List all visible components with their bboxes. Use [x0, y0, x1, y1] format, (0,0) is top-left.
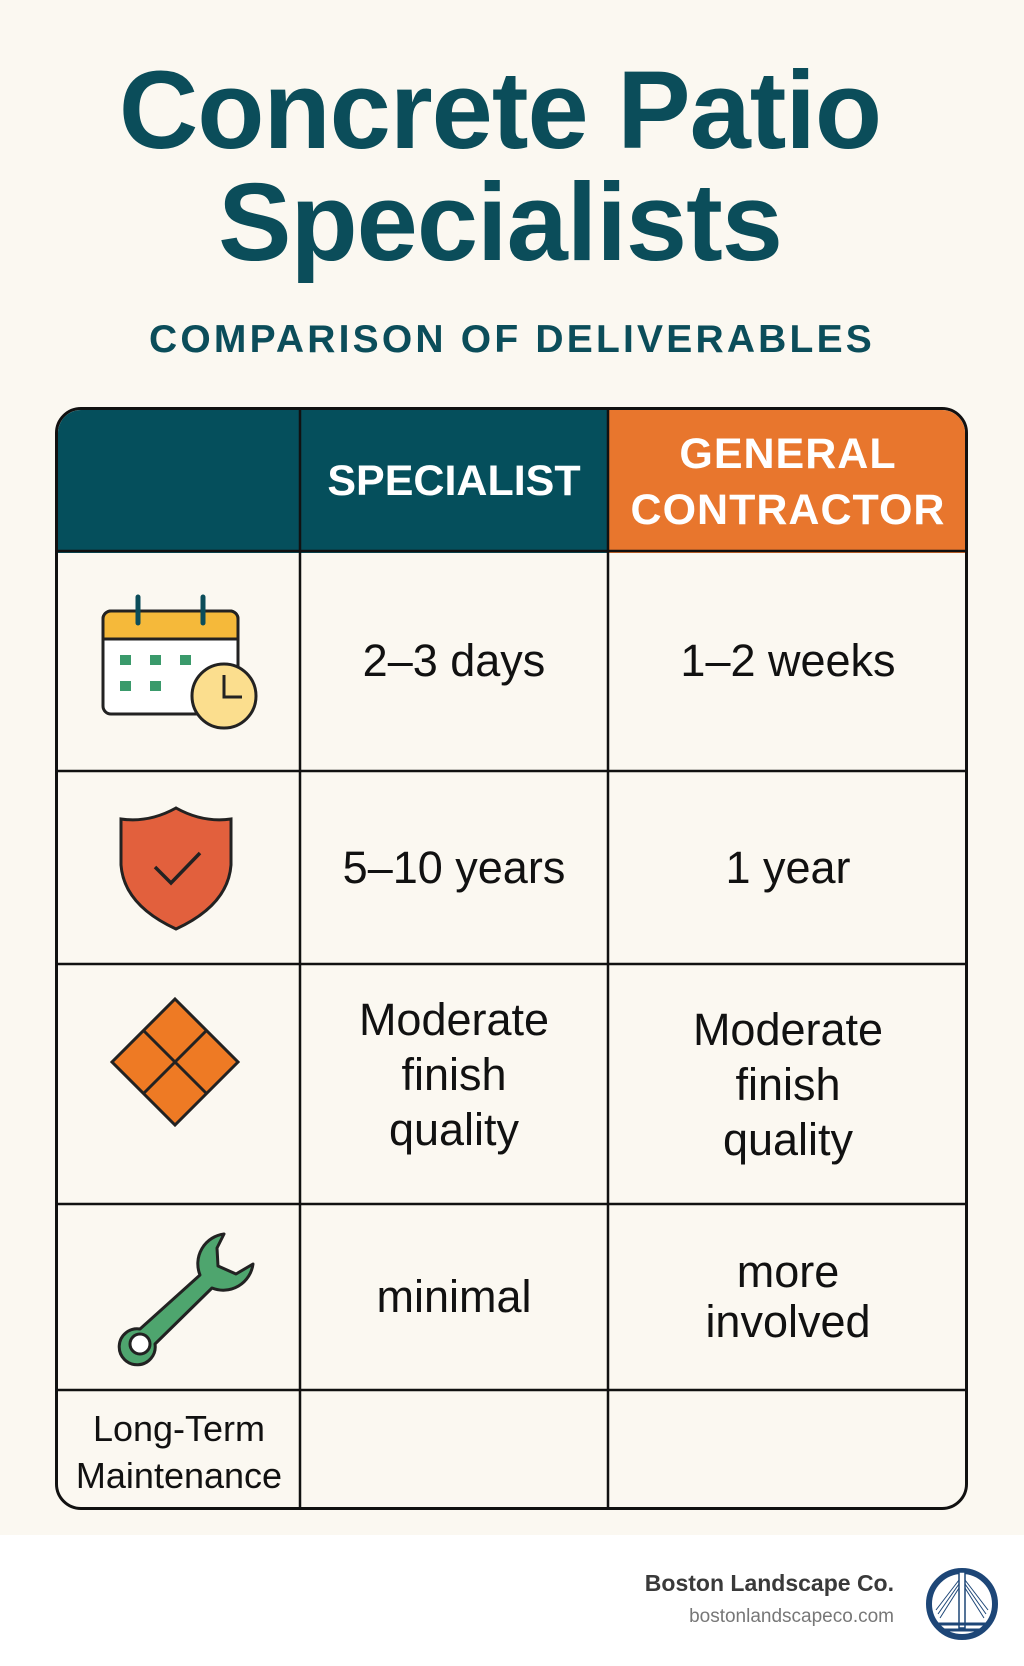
header: specialist: SPECIALIST — [327, 457, 581, 505]
title — [119, 49, 881, 284]
cell: contractor warranty: 1 year — [725, 842, 851, 893]
row label: long-term maintenance — [76, 1408, 282, 1496]
header: general contractor: CONTRACTOR — [631, 486, 945, 534]
title: Specialists — [218, 161, 782, 284]
icon: tile diamond — [110, 997, 240, 1127]
footer brand text: bostonlandscapeco.com — [689, 1606, 894, 1627]
cell: specialist finish: finish — [401, 1048, 507, 1100]
cell: specialist finish: quality — [389, 1104, 519, 1154]
header: general contractor — [608, 410, 968, 553]
footer brand text: Boston Landscape Co. — [645, 1570, 894, 1596]
icon: calendar with clock — [102, 594, 258, 730]
footer brand text — [645, 1570, 894, 1627]
cell: specialist finish — [359, 994, 549, 1154]
table — [55, 407, 968, 1510]
cell: specialist finish: Moderate — [359, 994, 549, 1044]
icon: wrench — [118, 1232, 254, 1366]
title: Concrete Patio — [119, 49, 881, 172]
header: blank — [58, 410, 300, 553]
header: specialist — [300, 410, 608, 553]
cell: contractor finish: quality — [723, 1114, 853, 1164]
cell: contractor finish: Moderate — [693, 1004, 883, 1054]
row label: long-term maintenance: Long-Term — [93, 1408, 265, 1448]
subtitle: COMPARISON OF DELIVERABLES — [149, 318, 875, 361]
cell: contractor maintenance: more — [737, 1246, 839, 1297]
cell: contractor finish — [693, 1004, 883, 1164]
cell: specialist maintenance: minimal — [376, 1271, 532, 1322]
cell: specialist warranty: 5–10 years — [343, 842, 565, 893]
cell: contractor finish: finish — [735, 1058, 841, 1110]
logo — [926, 1568, 998, 1640]
icon: shield — [120, 806, 232, 931]
cell: contractor maintenance: involved — [705, 1296, 871, 1347]
grid lines — [58, 410, 965, 1507]
cell: contractor time: 1–2 weeks — [680, 635, 896, 686]
cell: specialist time: 2–3 days — [363, 635, 545, 686]
cell: contractor maintenance — [705, 1246, 871, 1347]
header: general contractor: GENERAL — [679, 430, 897, 478]
row label: long-term maintenance: Maintenance — [76, 1454, 282, 1496]
